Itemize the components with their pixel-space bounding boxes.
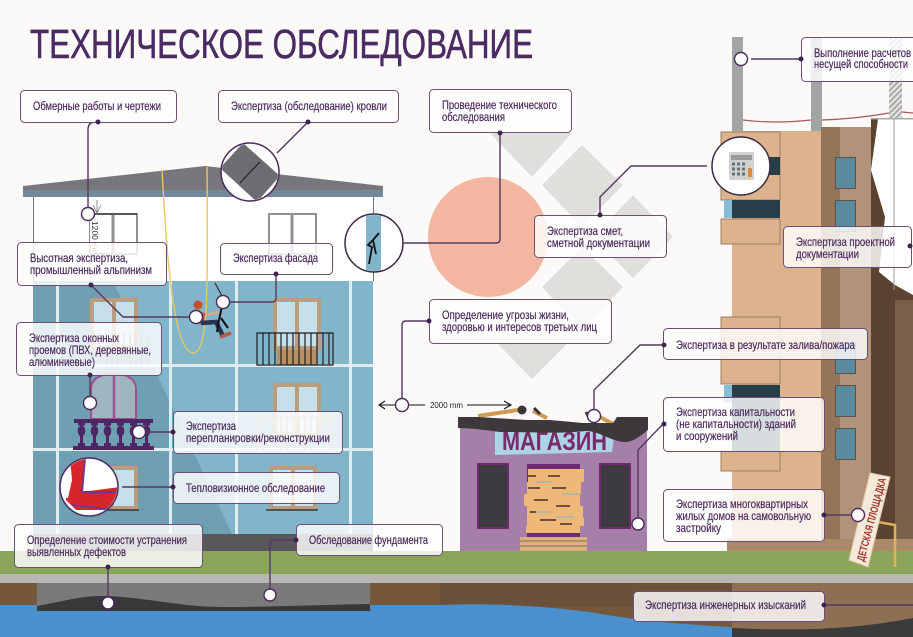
label: estimates: Экспертиза смет, [547, 224, 623, 238]
label: estimates [534, 212, 666, 258]
label: threat [426, 300, 612, 344]
shop building [458, 406, 648, 551]
label: estimates: сметной документации [547, 236, 650, 250]
label: high-altitude: Высотная экспертиза, [30, 251, 128, 265]
shop windows [478, 464, 508, 528]
label: engineering surveys: Экспертиза инженерных изысканий [645, 598, 806, 612]
label: measurement [20, 90, 176, 124]
label: capital: (не капитальности) зданий [676, 417, 796, 431]
faint railings [100, 333, 333, 450]
climbing rope [162, 167, 207, 353]
magnifier: calculator [712, 137, 770, 195]
label: thermal: Тепловизионное обследование [186, 481, 325, 495]
label: replanning: Экспертиза [186, 419, 236, 433]
label: facade [220, 244, 332, 276]
label: replanning: перепланировки/реконструкции [186, 431, 330, 445]
label: windows: алюминиевые) [29, 355, 95, 369]
label: flood or fire: Экспертиза в результате залива/пожара [676, 338, 855, 352]
dimension line 2000 mm [379, 401, 511, 410]
climber figure [194, 283, 231, 337]
title: ТЕХНИЧЕСКОЕ ОБСЛЕДОВАНИЕ [30, 21, 533, 67]
shop sign [495, 428, 615, 455]
tower body [732, 131, 821, 539]
label: capital [662, 398, 824, 452]
label: cost [14, 524, 202, 570]
roof poles and wires [732, 37, 743, 131]
label: cost: Определение стоимости устранения [27, 533, 187, 547]
label: technical inspection: обследования [442, 110, 505, 124]
label: flood or fire [662, 328, 868, 360]
building: apartment block under inspection [23, 166, 383, 611]
windows [90, 214, 316, 254]
dimension line 2000 mm: 2000 mm [430, 401, 463, 410]
label: windows [16, 322, 162, 378]
roof [23, 166, 383, 197]
label: capital: и сооружений [676, 429, 738, 443]
label: foundation [294, 524, 442, 556]
shop walls [460, 423, 647, 551]
label: replanning [170, 412, 342, 454]
building: high-rise under construction [721, 37, 913, 551]
label: measurement: Обмерные работы и чертежи [33, 99, 161, 113]
label: roof: Экспертиза (обследование) кровли [231, 99, 387, 113]
broken roof [478, 410, 613, 424]
steps [520, 537, 587, 551]
marker circles [82, 52, 864, 609]
playground sign: ДЕТСКАЯ ПЛОЩАДКА [855, 477, 889, 563]
playground sign [849, 473, 895, 567]
label: project documentation: документации [796, 247, 859, 261]
label: windows: проемов (ПВХ, деревянные, [29, 343, 151, 357]
label: unauthorized construction: Экспертиза многоквартирных [676, 497, 808, 511]
label: high-altitude [18, 242, 166, 288]
label: project documentation [784, 226, 912, 268]
arched purple balcony [73, 374, 154, 450]
label: unauthorized construction: застройку [676, 521, 721, 535]
label: roof [218, 90, 398, 124]
ground and underground layers [0, 551, 913, 637]
label: capital: Экспертиза капитальности [676, 405, 795, 419]
label: high-altitude: промышленный альпинизм [30, 263, 152, 277]
label: facade: Экспертиза фасада [233, 251, 318, 265]
foundation [33, 534, 373, 551]
label: foundation: Обследование фундамента [309, 533, 428, 547]
broken wall [871, 119, 913, 539]
balconies and dark openings [721, 132, 780, 471]
magnifier: thermal imaging [60, 458, 120, 516]
label: threat: Определение угрозы жизни, [442, 308, 569, 322]
label: load calculations [798, 38, 913, 82]
window measurement 1200 mm: 1200 mm [90, 221, 100, 256]
label: unauthorized construction: жилых домов на самовольную [676, 509, 811, 523]
label: cost: выявленных дефектов [27, 545, 126, 559]
magnifier: facade crack [345, 214, 403, 272]
decorative background shapes [428, 133, 673, 379]
label: unauthorized construction [664, 490, 826, 542]
label: technical inspection [430, 90, 572, 136]
window measurement 1200 mm [90, 200, 101, 256]
magnifier: roof crack [220, 143, 280, 202]
balcony railing [257, 333, 333, 365]
label: thermal [170, 472, 340, 504]
facade [33, 281, 373, 534]
label: engineering surveys [634, 592, 826, 622]
callout connectors and markers [82, 52, 913, 609]
shop building: МАГАЗИН [502, 426, 607, 456]
label: technical inspection: Проведение технического [442, 98, 557, 112]
boarded door [527, 464, 580, 538]
label: threat: здоровью и интересов третьих лиц [442, 320, 597, 334]
side windows [836, 158, 856, 460]
label: windows: Экспертиза оконных [29, 331, 119, 345]
